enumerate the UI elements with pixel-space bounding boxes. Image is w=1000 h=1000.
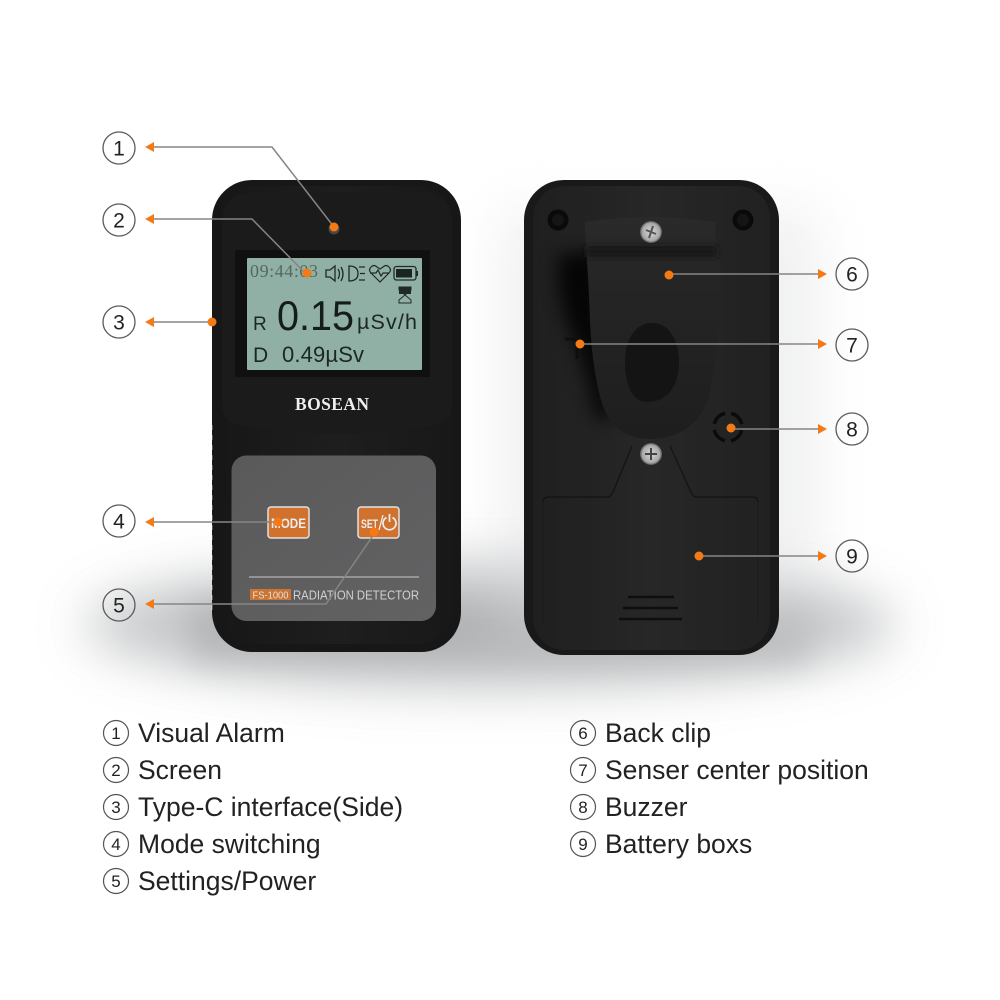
callout lines: [152, 147, 820, 604]
legend: left column: Settings/Power: [138, 866, 316, 896]
legend: right column: 7: [578, 761, 588, 780]
SET power button: [358, 507, 399, 538]
legend: right column: Battery boxs: [605, 829, 752, 859]
LCD screen: [247, 258, 422, 370]
legend: left column: 3: [111, 798, 121, 817]
belt clip: [585, 217, 720, 439]
control panel: [232, 456, 436, 621]
back body: [524, 180, 779, 655]
legend: right column: Buzzer: [605, 792, 688, 822]
legend: left column: 1: [111, 724, 121, 743]
numbered markers: 1: [113, 138, 125, 160]
cumulative dose reading: D: [253, 344, 268, 367]
legend: left column: Type-C interface(Side): [138, 792, 403, 822]
numbered markers: 4: [113, 510, 125, 534]
model label: FS-1000: [252, 590, 289, 602]
alarm LED: [328, 224, 340, 234]
front body: [212, 180, 461, 652]
numbered markers: 3: [113, 312, 125, 334]
legend: right column: 6: [578, 724, 588, 743]
legend: left column: 5: [111, 872, 121, 891]
numbered markers: 2: [113, 210, 125, 232]
clip screw: [640, 221, 662, 243]
LCD time: 09:44:03: [250, 261, 318, 281]
panel: front of device: [212, 180, 461, 652]
legend: left column: Mode switching: [138, 829, 321, 859]
lower screw: [640, 443, 662, 465]
numbered markers: 5: [113, 594, 125, 618]
buzzer holes: [711, 410, 745, 444]
corner screw holes: [548, 210, 754, 230]
dose rate reading: R: [253, 314, 267, 335]
legend: right column: Senser center position: [605, 755, 869, 785]
battery latch: [619, 597, 682, 619]
legend: left column: Screen: [138, 755, 222, 785]
LCD screen: 0.15: [277, 292, 354, 339]
callout arrowheads and dots: [145, 142, 827, 609]
battery box: [543, 446, 758, 622]
legend: right column: 8: [578, 798, 588, 817]
MODE button: MODE: [271, 515, 306, 531]
legend: left column: 4: [111, 835, 121, 854]
legend: right column: [570, 718, 869, 859]
numbered markers: 6: [846, 264, 858, 286]
model label: RADIATION DETECTOR: [293, 588, 419, 602]
legend: left column: [104, 718, 403, 896]
legend: right column: 9: [578, 835, 588, 854]
legend: left column: Visual Alarm: [138, 718, 285, 748]
status icons: [326, 266, 418, 303]
MODE button: [268, 507, 309, 538]
model label: [250, 588, 419, 602]
clip shadow: [558, 250, 612, 420]
legend: right column: Back clip: [605, 718, 711, 748]
LCD screen: 0.49µSv: [282, 342, 364, 367]
numbered markers: 8: [846, 418, 858, 442]
clip opening: [625, 323, 679, 402]
numbered markers: 9: [846, 546, 858, 568]
SET power button: SET: [361, 517, 378, 531]
LCD screen: µSv/h: [357, 310, 417, 334]
legend: left column: 2: [111, 761, 121, 780]
brand: BOSEAN: [295, 394, 369, 414]
panel: back of device: [524, 180, 779, 655]
background floor shadow: [85, 210, 895, 687]
numbered markers: 7: [846, 334, 858, 358]
numbered markers: [103, 132, 868, 621]
sensor mark: [565, 339, 580, 359]
screen bezel: [222, 192, 452, 434]
